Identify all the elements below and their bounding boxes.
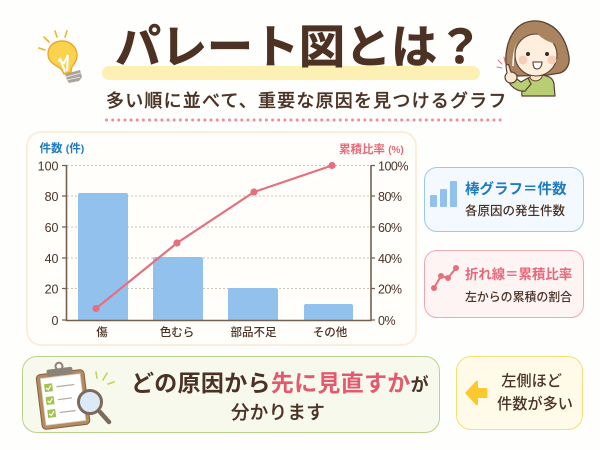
right tick labels: 80%: [378, 190, 402, 204]
icon: clipboard and magnifier: [36, 362, 115, 430]
icon: light bulb: [38, 30, 82, 83]
panel: takeaway: [22, 356, 440, 433]
legend heading: 棒グラフ＝件数: [465, 182, 566, 198]
panel: line legend: [424, 250, 584, 318]
left tick labels: 20: [45, 282, 59, 296]
right tick labels: 0%: [378, 314, 395, 328]
category labels: 部品不足: [230, 325, 277, 339]
panel: bar legend: [424, 167, 584, 232]
category labels: [96, 325, 348, 339]
left tick labels: 60: [45, 221, 59, 235]
left axis title: 件数 (件): [40, 141, 84, 155]
right tick labels: [378, 160, 408, 328]
title: パレート図とは？: [115, 21, 483, 73]
category labels: 色むら: [160, 325, 194, 339]
cumulative line: [92, 162, 336, 312]
bars: [78, 193, 353, 320]
legend text: 左からの累積の割合: [465, 290, 572, 304]
left tick labels: 40: [45, 252, 59, 266]
right tick labels: 40%: [378, 252, 402, 266]
note text: 左側ほど: [501, 373, 562, 390]
left tick labels: 80: [45, 190, 59, 204]
takeaway text line 2: 分かります: [231, 402, 325, 423]
left tick labels: 0: [52, 314, 59, 328]
note text: [497, 372, 573, 413]
axes: [62, 165, 375, 320]
icon: woman pointing: [496, 20, 570, 97]
right tick labels: 20%: [378, 282, 402, 296]
left tick labels: 100: [38, 160, 59, 174]
icon: line: [431, 265, 459, 291]
icon: bars: [430, 181, 457, 207]
category labels: その他: [313, 326, 348, 339]
note text: 件数が多い: [497, 396, 573, 413]
subtitle: 多い順に並べて、重要な原因を見つけるグラフ: [106, 91, 508, 111]
right axis title: 累積比率 (%): [339, 142, 404, 156]
category labels: 傷: [96, 325, 108, 339]
icon: left arrow: [465, 380, 488, 406]
right tick labels: 60%: [378, 221, 402, 235]
legend text: 各原因の発生件数: [465, 204, 565, 218]
pareto chart: [38, 141, 408, 339]
panel: note: [456, 356, 583, 430]
legend heading: 折れ線＝累積比率: [465, 267, 572, 282]
left tick labels: [38, 160, 59, 328]
dotted divider: [105, 118, 502, 122]
title highlight: [102, 66, 480, 80]
takeaway text line 1: どの原因から先に見直すかが: [131, 370, 429, 396]
right tick labels: 100%: [378, 160, 408, 174]
panel: pareto chart: [26, 131, 417, 346]
